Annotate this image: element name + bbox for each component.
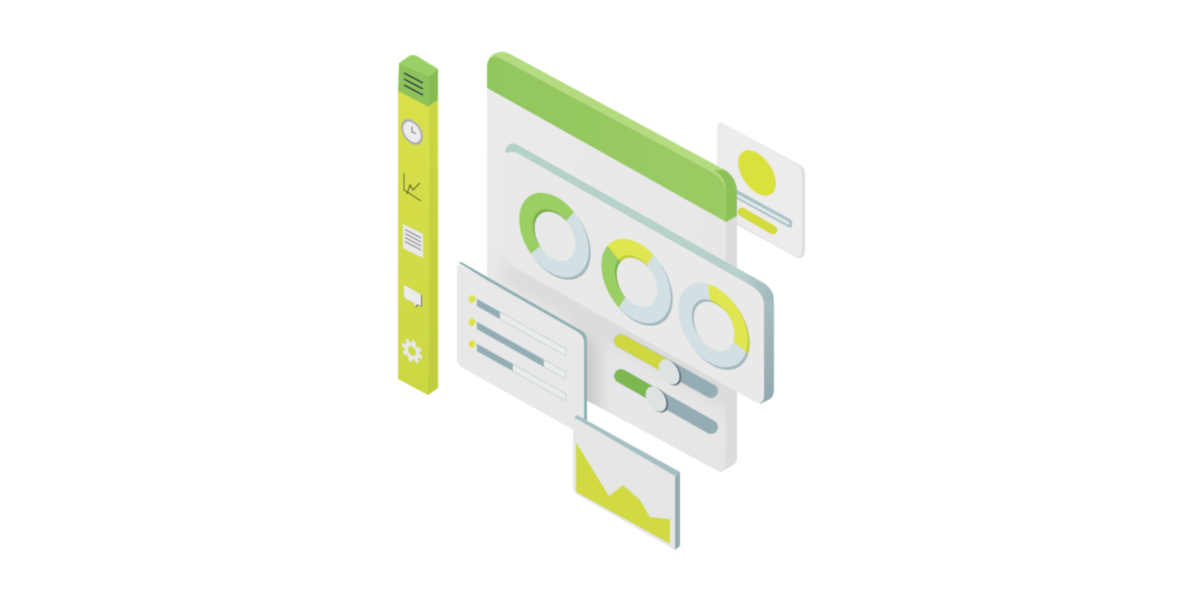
panel: small profile card — [717, 123, 805, 258]
list bar 2 — [477, 322, 566, 379]
donut chart 1 — [526, 191, 584, 282]
list bar 3 — [477, 344, 566, 401]
icon: document — [403, 224, 423, 258]
icon: hamburger menu — [404, 73, 423, 95]
donut chart 2 — [608, 237, 666, 328]
icon: yellow avatar circle — [738, 142, 776, 204]
slider 1 knob — [659, 356, 681, 389]
panel: area chart card — [573, 415, 680, 550]
slider 2 knob — [646, 382, 668, 416]
sidebar column — [398, 55, 438, 395]
profile name bar inner — [737, 194, 789, 225]
sidebar green cap — [398, 55, 438, 107]
area chart yellow shape — [576, 442, 670, 544]
panel: list card — [457, 262, 587, 436]
slider 1 — [621, 341, 711, 391]
icon: chat bubble — [404, 285, 422, 308]
list bullet dots — [468, 295, 476, 348]
icon: line chart — [404, 173, 421, 201]
panel: donut chart panel — [503, 143, 774, 404]
slider 2 green fill — [621, 376, 656, 396]
donut chart 3 — [685, 281, 743, 372]
list bar 1 — [477, 299, 566, 356]
panel shadows on window body — [506, 265, 726, 408]
profile name bar — [737, 190, 792, 228]
panel: main window body — [487, 88, 737, 472]
isometric dashboard illustration — [397, 51, 806, 550]
window header green bar — [487, 52, 737, 222]
slider 2 — [621, 376, 711, 427]
slider 1 yellow fill — [621, 341, 669, 368]
icon: clock — [401, 115, 423, 149]
profile yellow pill — [742, 212, 773, 230]
icon: gear — [403, 338, 421, 364]
